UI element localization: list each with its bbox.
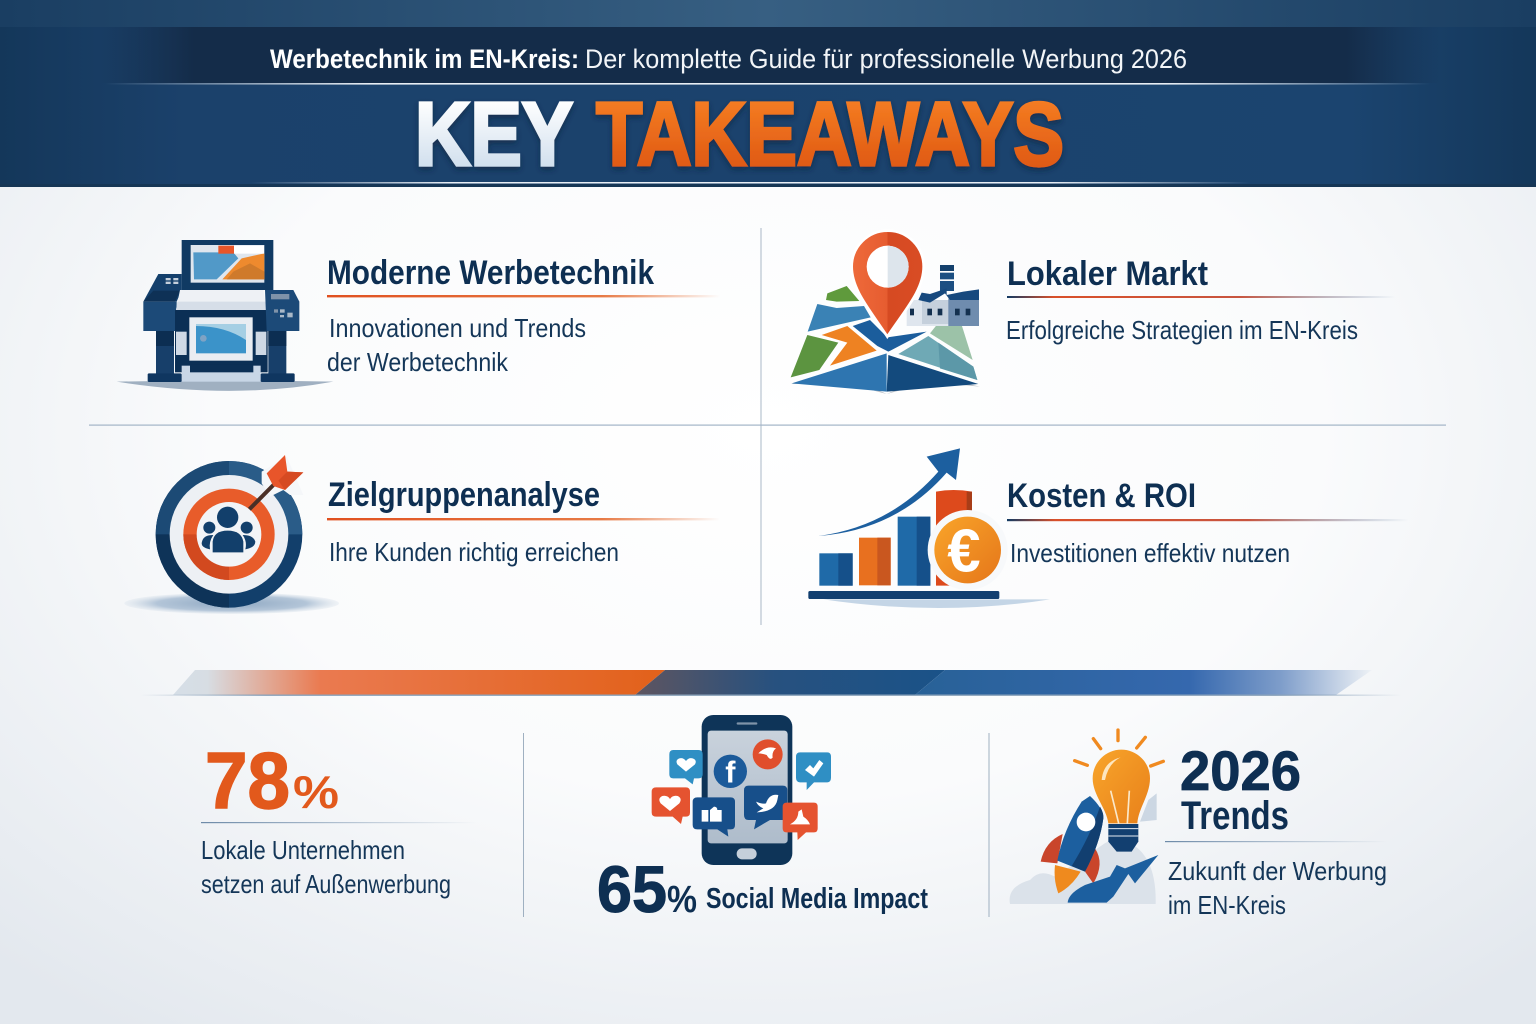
number (205, 736, 339, 825)
description: setzen auf Außenwerbung (201, 869, 451, 899)
icon: smartphone with social bubbles (652, 715, 831, 865)
heading: Lokaler Markt (1007, 255, 1208, 293)
number: % (293, 766, 339, 818)
description: Erfolgreiche Strategien im EN-Kreis (1006, 315, 1358, 345)
description: Lokale Unternehmen (201, 835, 405, 865)
panel: Lokaler Markt (791, 231, 1395, 394)
label: Social Media Impact (706, 883, 928, 915)
stat: 65 percent social media (597, 715, 928, 926)
subtitle: Der komplette Guide für professionelle Werbung 2026 (585, 44, 1187, 74)
description: Innovationen und Trends (329, 313, 586, 343)
heading: 2026 (1180, 739, 1301, 802)
main title: KEY (415, 85, 573, 185)
icon: rocket and light bulb (1010, 730, 1163, 904)
description: im EN-Kreis (1168, 890, 1286, 920)
description: Ihre Kunden richtig erreichen (329, 537, 619, 567)
stat: 2026 trends (1010, 730, 1387, 920)
subtitle: Werbetechnik im EN-Kreis: (270, 44, 579, 74)
icon: map pin (791, 231, 980, 394)
header banner (0, 0, 1536, 187)
icon: printer (117, 240, 333, 391)
description: Zukunft der Werbung (1168, 856, 1387, 886)
description (201, 835, 451, 899)
number: 78 (205, 736, 290, 825)
letter f: f (725, 755, 736, 789)
panel: Zielgruppenanalyse (124, 455, 720, 614)
euro sign: € (947, 518, 981, 585)
description (327, 313, 586, 377)
description (1168, 856, 1387, 920)
heading: Kosten & ROI (1007, 477, 1196, 515)
main title: TAKEAWAYS (596, 85, 1064, 185)
main title (415, 85, 1064, 185)
number: 65 (597, 852, 667, 926)
description: Investitionen effektiv nutzen (1010, 538, 1290, 568)
icon: bar chart with euro coin (808, 448, 1050, 608)
panel: Kosten und ROI (808, 448, 1408, 608)
heading: Moderne Werbetechnik (327, 254, 654, 292)
number: % (667, 879, 697, 921)
subtitle (270, 44, 1187, 74)
heading: Zielgruppenanalyse (328, 476, 600, 514)
description: der Werbetechnik (327, 347, 509, 377)
icon: target (124, 455, 339, 614)
gradient divider band (140, 670, 1402, 696)
panel: Moderne Werbetechnik (117, 240, 720, 391)
stat: 78 percent (201, 736, 476, 899)
heading: Trends (1181, 794, 1289, 838)
heading (1180, 739, 1301, 838)
